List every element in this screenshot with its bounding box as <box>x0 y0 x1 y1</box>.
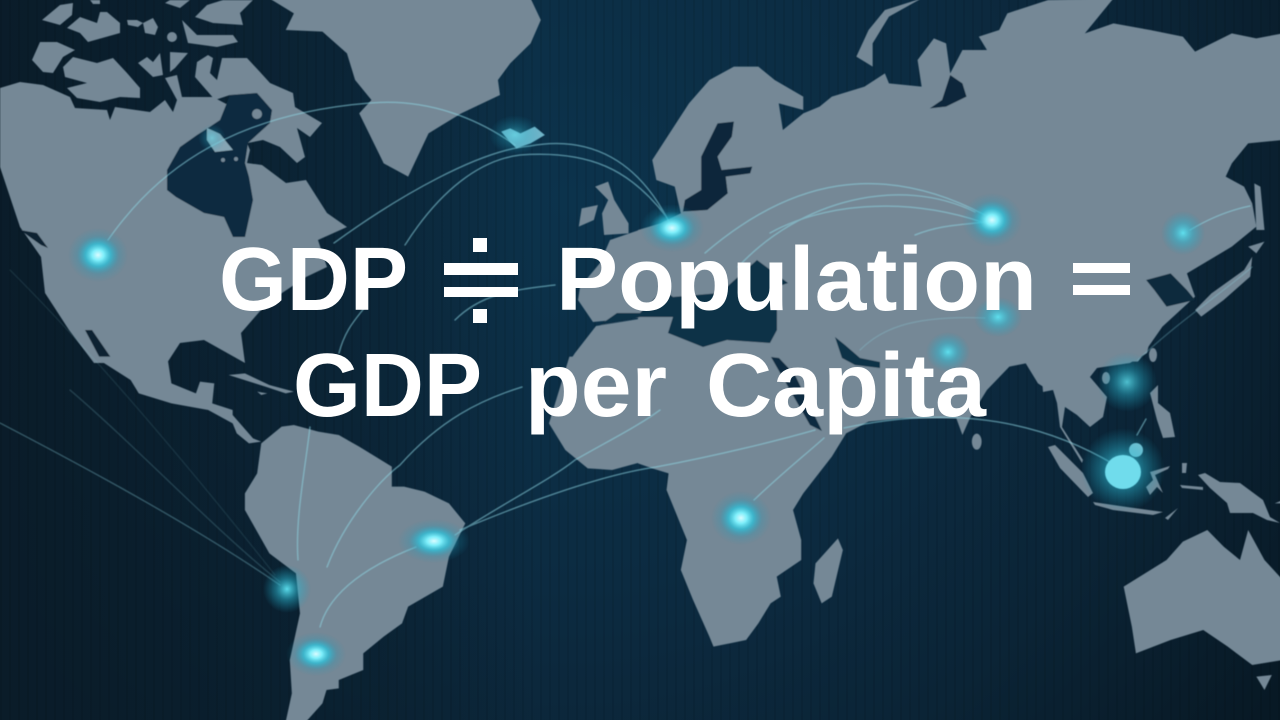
arc: Europe to Asia one <box>705 184 985 253</box>
arc: Chile to Brazil <box>320 547 416 627</box>
node: South Asia north <box>974 297 1022 337</box>
first line: GDP: GDP <box>219 230 408 330</box>
Seram <box>1180 485 1203 490</box>
North America landmass <box>0 75 347 363</box>
Sakhalin <box>1254 183 1264 230</box>
node: Borneo core <box>1105 455 1141 489</box>
Taiwan <box>1149 348 1157 362</box>
Western Europe <box>578 228 645 322</box>
map: Africa, Arabia, India, Australia <box>638 357 1280 690</box>
Gulf of California <box>85 330 114 362</box>
Mediterranean Sea <box>600 260 788 347</box>
Arctic islands <box>32 0 253 102</box>
New Zealand edge <box>1275 500 1280 503</box>
Sumatra <box>1048 445 1093 497</box>
arc: Pacific streak faint <box>70 390 280 582</box>
Moluccas <box>1182 463 1187 473</box>
arc: Borneo streak <box>1137 419 1146 435</box>
Central America <box>94 357 261 443</box>
Philippines <box>1150 385 1175 438</box>
Indochina and Malay peninsula <box>1040 340 1150 463</box>
Borneo north tip <box>1129 443 1143 457</box>
node: East Asia <box>1161 211 1205 255</box>
node: Iceland glow <box>489 115 541 155</box>
arc: Caribbean <box>339 307 365 353</box>
node: Europe <box>640 204 704 252</box>
Hainan <box>1102 372 1110 384</box>
arc: mid Atlantic <box>455 285 555 320</box>
Yellow Sea <box>1146 273 1195 307</box>
node: Brazil <box>398 519 470 563</box>
northern Japan fragment <box>1248 242 1264 253</box>
arc: Europe to Asia two <box>738 195 975 267</box>
map: Greenland, Iceland, British Isles <box>269 0 629 235</box>
arc: Brazil to East Africa <box>455 410 660 535</box>
second line: Capita: Capita <box>706 336 987 436</box>
node: South Asia south <box>926 332 970 372</box>
arc: Central Asia <box>915 222 985 235</box>
arc: Pacific rim <box>1138 267 1252 360</box>
Australia <box>1124 530 1280 665</box>
North Africa coast <box>569 318 645 362</box>
Gulf of Ob <box>930 75 967 108</box>
Japan <box>1195 257 1252 317</box>
map: Eurasia <box>638 0 1280 362</box>
New Guinea <box>1198 473 1280 523</box>
arc: Europe to Asia three <box>770 206 982 233</box>
icon: equals sign <box>1073 263 1130 295</box>
Baffin Island <box>195 55 322 163</box>
Africa, Arabia and India <box>638 357 1048 647</box>
title formula <box>219 230 1130 436</box>
Tasmania <box>1256 675 1272 690</box>
node: South China Sea <box>1097 352 1157 412</box>
Pacific coast inlet <box>20 230 48 248</box>
arc: Africa to South-East Asia <box>844 417 1115 465</box>
arc: Atlantic crossing one <box>334 144 672 243</box>
Ireland <box>579 205 598 227</box>
Hudson Bay <box>167 93 272 237</box>
second line: GDP: GDP <box>293 336 482 436</box>
node: Peru <box>263 565 311 613</box>
glowing city nodes <box>68 115 1205 676</box>
arc: Pacific streak <box>0 423 280 585</box>
Iceland <box>501 127 545 148</box>
map: Central and South America <box>94 357 643 720</box>
arc: Pacific streak faint two <box>10 270 275 575</box>
Hispaniola <box>257 392 267 395</box>
Persian Gulf <box>835 337 880 368</box>
South America <box>245 425 465 720</box>
node: Central Asia <box>962 193 1022 247</box>
node: Central Africa <box>711 491 771 545</box>
arc: Atlantic crossing two <box>405 154 665 245</box>
Eurasia landmass <box>638 0 1280 362</box>
Red Sea <box>771 357 822 431</box>
Timor <box>1165 508 1178 520</box>
arc: South America to Caribbean <box>327 387 522 567</box>
node: Canada glow <box>198 124 226 152</box>
arc: East Asia <box>1190 206 1250 230</box>
Sulawesi <box>1146 466 1170 495</box>
Great Britain <box>595 182 629 235</box>
arc: Central Asia to India <box>860 318 985 350</box>
arc: Africa node link <box>754 438 824 500</box>
icon: division sign <box>444 238 518 323</box>
Greenland <box>269 0 541 177</box>
Novaya Zemlya <box>856 0 922 67</box>
arc: Brazil to Africa <box>460 430 815 530</box>
map: Europe and Mediterranean <box>569 228 880 431</box>
Hudson Bay islets <box>221 157 238 162</box>
Cuba <box>229 373 294 393</box>
node: North America <box>68 228 128 282</box>
Sri Lanka <box>972 434 982 450</box>
node: Borneo <box>1081 428 1165 512</box>
James Bay shoal <box>207 128 233 152</box>
arc: South America north-south <box>297 427 310 560</box>
Java <box>1093 502 1163 515</box>
Baltic Sea <box>683 122 752 212</box>
connection arcs <box>0 102 1252 627</box>
node: Argentina <box>286 632 346 676</box>
Madagascar <box>813 538 843 603</box>
map: South-East Asia <box>1040 340 1280 523</box>
arc: North America to Iceland <box>108 102 515 240</box>
first line: Population: Population <box>556 230 1037 330</box>
West Africa <box>549 357 643 470</box>
map: North America and Arctic <box>0 0 347 363</box>
Foxe Basin island <box>252 109 262 119</box>
second line: per: per <box>525 336 667 436</box>
